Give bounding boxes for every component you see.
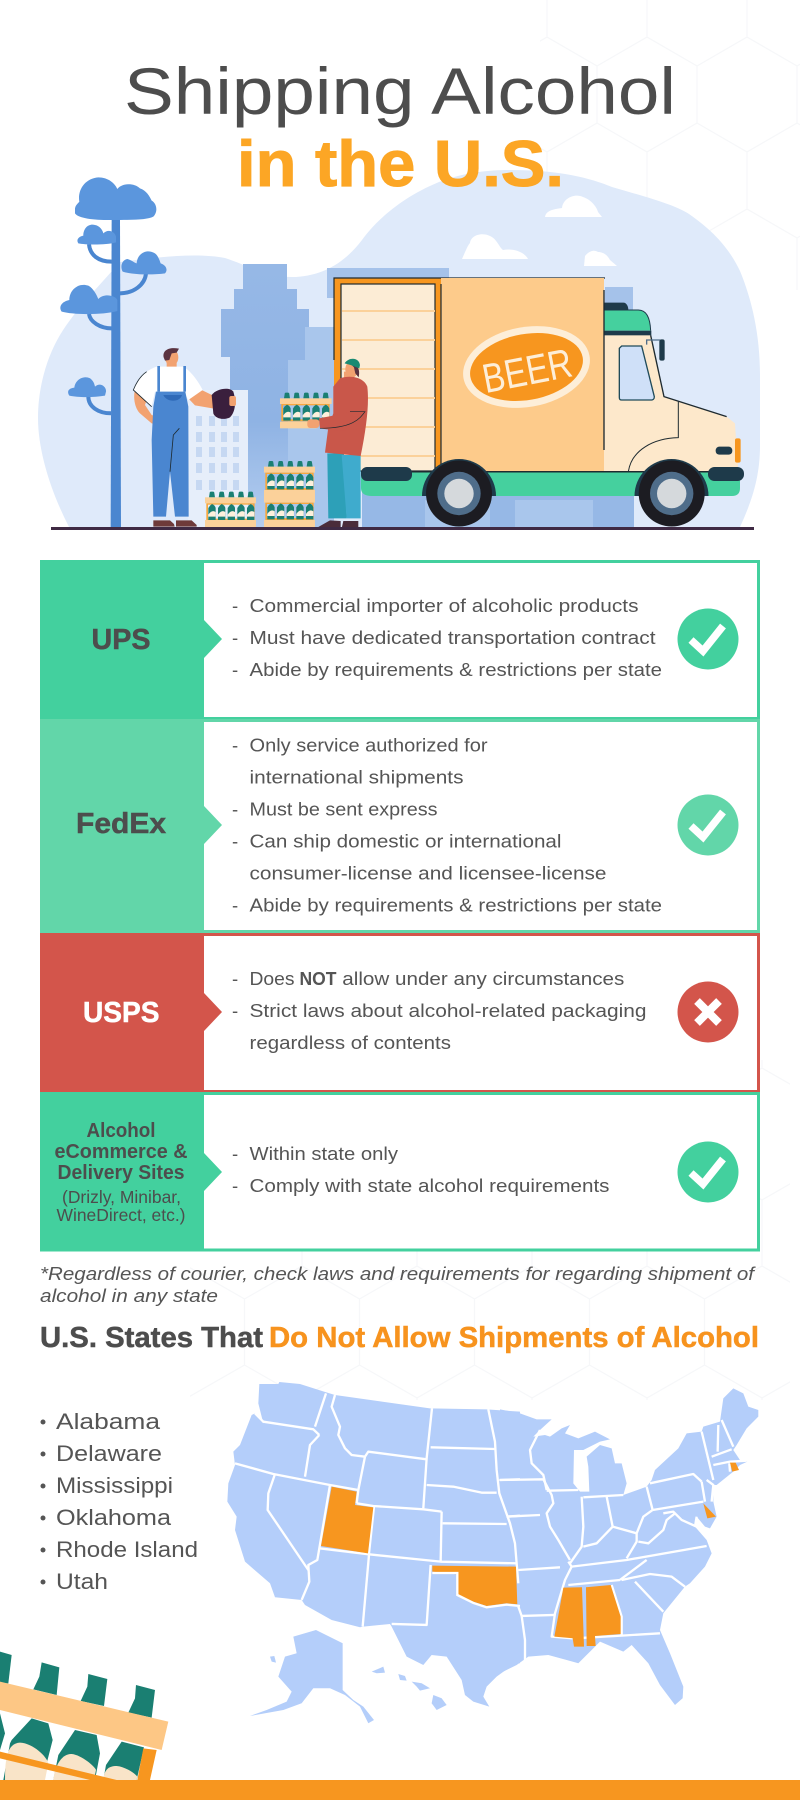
state list: Oklahoma xyxy=(56,1505,172,1530)
man in overalls xyxy=(133,348,236,527)
USPS restrictions list xyxy=(232,968,646,1053)
crates of bottles xyxy=(205,461,315,527)
UPS requirements list: - xyxy=(232,627,238,648)
panel: UPS: UPS xyxy=(92,624,150,656)
label: alcohol eCommerce: Alcohol xyxy=(86,1120,156,1142)
state list: Delaware xyxy=(56,1441,162,1466)
FedEx requirements list: - xyxy=(232,734,238,756)
USPS restrictions list: regardless of contents xyxy=(250,1032,451,1053)
FedEx requirements list: Abide by requirements & restrictions per state xyxy=(250,894,662,916)
UPS requirements list xyxy=(232,595,662,680)
background blob xyxy=(38,170,760,527)
icon: check mark xyxy=(678,608,738,670)
illustration: bottle crate corner xyxy=(0,1652,168,1780)
USPS restrictions list: Strict laws about alcohol-related packaging xyxy=(250,1000,646,1021)
state list: Alabama xyxy=(56,1409,161,1434)
UPS requirements list: - xyxy=(232,595,238,616)
panel: FedEx xyxy=(40,719,758,933)
icon: cross xyxy=(678,982,738,1042)
USPS restrictions list: - xyxy=(232,968,238,989)
panel: FedEx: FedEx xyxy=(76,808,166,840)
UPS requirements list: Commercial importer of alcoholic products xyxy=(250,595,638,616)
footnote xyxy=(40,1264,756,1306)
truck xyxy=(334,278,744,526)
state list: Rhode Island xyxy=(56,1537,198,1562)
eCommerce requirements list xyxy=(232,1143,610,1196)
UPS requirements list: Must have dedicated transportation contract xyxy=(250,627,656,648)
panel: USPS xyxy=(40,933,758,1093)
icon: check mark xyxy=(678,1142,738,1202)
bottom orange band xyxy=(0,1780,800,1800)
eCommerce requirements list: - xyxy=(232,1143,238,1164)
footnote: alcohol in any state xyxy=(40,1286,218,1306)
heading: states: Do Not Allow Shipments of Alcohol xyxy=(269,1322,759,1354)
USPS restrictions list: allow under any circumstances xyxy=(342,968,624,989)
eCommerce requirements list: - xyxy=(232,1175,238,1196)
US map xyxy=(227,1382,758,1723)
city buildings xyxy=(188,264,634,527)
UPS requirements list: Abide by requirements & restrictions per state xyxy=(250,659,662,680)
panel: alcohol eCommerce and delivery sites xyxy=(40,1092,758,1252)
highlighted western states xyxy=(321,1487,517,1606)
label: alcohol eCommerce: eCommerce & xyxy=(54,1141,188,1163)
state list xyxy=(40,1409,198,1594)
eastern land base xyxy=(500,1388,758,1705)
truck cab xyxy=(604,290,741,472)
label: alcohol eCommerce: Delivery Sites xyxy=(58,1162,184,1184)
heading: states xyxy=(40,1322,759,1354)
FedEx requirements list: international shipments xyxy=(250,766,464,788)
FedEx requirements list: consumer-license and licensee-license xyxy=(250,862,606,884)
FedEx requirements list: Must be sent express xyxy=(250,798,438,820)
eCommerce requirements list: Within state only xyxy=(250,1143,399,1164)
panel: USPS: USPS xyxy=(83,997,160,1029)
USPS restrictions list: - xyxy=(232,1000,238,1021)
FedEx requirements list: - xyxy=(232,894,238,916)
wheels xyxy=(422,459,708,526)
chassis xyxy=(361,472,740,496)
panel: UPS xyxy=(40,560,758,719)
heading: states: U.S. States That xyxy=(40,1322,263,1354)
state list: Utah xyxy=(56,1569,108,1594)
label: alcohol eCommerce xyxy=(54,1120,188,1225)
title: in the U.S. xyxy=(237,127,564,200)
FedEx requirements list: - xyxy=(232,798,238,820)
FedEx requirements list: - xyxy=(232,830,238,852)
label: alcohol eCommerce: (Drizly, Minibar, xyxy=(62,1187,181,1207)
icon: check mark xyxy=(678,794,738,856)
title xyxy=(124,54,676,200)
USPS restrictions list: Does xyxy=(250,968,294,989)
footnote: *Regardless of courier, check laws and requirements for regarding shipment of xyxy=(40,1264,756,1284)
FedEx requirements list: Only service authorized for xyxy=(250,734,488,756)
ground line xyxy=(51,527,754,530)
FedEx requirements list xyxy=(232,734,662,916)
highlighted eastern states xyxy=(554,1463,739,1647)
BEER logo xyxy=(457,316,596,418)
FedEx requirements list: Can ship domestic or international xyxy=(250,830,562,852)
UPS requirements list: - xyxy=(232,659,238,680)
people and crates xyxy=(133,348,368,527)
delivery man with crate xyxy=(280,359,368,527)
cargo door xyxy=(334,278,441,471)
eastern states xyxy=(500,1420,747,1663)
western states xyxy=(227,1382,520,1723)
background hexagon pattern xyxy=(190,0,800,1400)
state list: Mississippi xyxy=(56,1473,173,1498)
eCommerce requirements list: Comply with state alcohol requirements xyxy=(250,1175,610,1196)
tree xyxy=(60,177,167,527)
label: alcohol eCommerce: WineDirect, etc.) xyxy=(56,1205,186,1225)
USPS restrictions list: NOT xyxy=(300,968,337,989)
illustration: delivery truck scene xyxy=(38,170,760,530)
white clouds xyxy=(462,196,617,266)
BEER logo: BEER xyxy=(479,340,576,402)
title: Shipping Alcohol xyxy=(124,54,676,128)
cargo box xyxy=(441,278,604,471)
